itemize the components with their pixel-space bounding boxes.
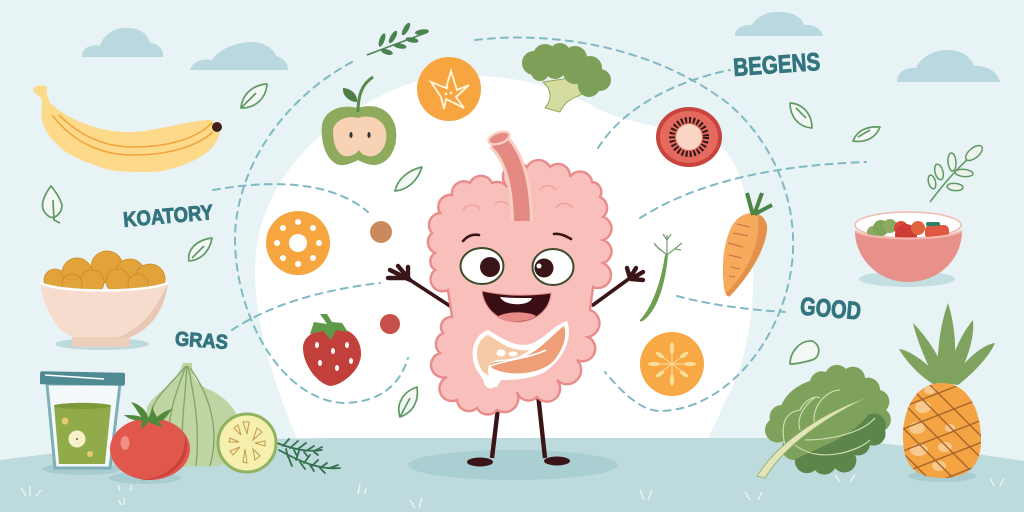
icon: banana xyxy=(33,85,222,172)
icon: red dot xyxy=(380,314,400,334)
icon: orange star circle xyxy=(417,57,481,121)
label: GRAS: GRAS xyxy=(174,328,229,354)
leaf outlines xyxy=(43,84,880,417)
mouth xyxy=(482,291,551,322)
intestine body xyxy=(428,160,612,414)
icon: sprig top xyxy=(367,22,429,56)
icon: bowl of salad xyxy=(855,212,962,287)
gut character xyxy=(388,129,643,467)
icon: bowl of grains xyxy=(40,251,168,350)
icon: tomato slice xyxy=(656,107,722,167)
feet xyxy=(467,456,570,466)
stomach xyxy=(473,321,569,391)
icon: broccoli xyxy=(522,43,611,112)
grass tufts xyxy=(21,458,1004,508)
clouds xyxy=(82,12,1000,82)
icon: tomato xyxy=(109,402,190,484)
dashed connector lines xyxy=(213,38,866,411)
arms xyxy=(407,278,630,308)
label: GOOD: GOOD xyxy=(799,292,862,326)
esophagus opening xyxy=(487,129,511,147)
esophagus xyxy=(497,140,522,221)
icon: sprig right xyxy=(927,143,985,202)
right eye xyxy=(532,249,574,285)
icon: citrus slice left xyxy=(266,211,330,275)
icon: rosemary xyxy=(277,439,340,473)
icon: strawberry xyxy=(303,314,361,386)
ground xyxy=(0,438,1024,512)
left eye xyxy=(460,248,504,284)
icon: citrus slice right xyxy=(640,332,704,396)
icon: onion xyxy=(147,363,243,467)
icon: apple xyxy=(322,77,396,165)
hands xyxy=(388,266,643,280)
white central blob xyxy=(255,76,753,445)
icon: brown dot xyxy=(370,221,392,243)
fold marks xyxy=(463,185,573,210)
icon: carrot xyxy=(723,193,772,296)
label: KOATORY: KOATORY xyxy=(122,201,214,232)
label: BEGENS: BEGENS xyxy=(732,48,821,82)
icon: kale leaf xyxy=(757,365,891,478)
icon: herb sprig stalk xyxy=(640,234,682,322)
icon: juice glass xyxy=(40,371,125,475)
eyebrows xyxy=(463,234,571,241)
icon: cucumber slice xyxy=(218,414,276,472)
legs xyxy=(492,394,545,458)
icon: pineapple xyxy=(899,303,995,482)
character shadow xyxy=(408,450,618,480)
